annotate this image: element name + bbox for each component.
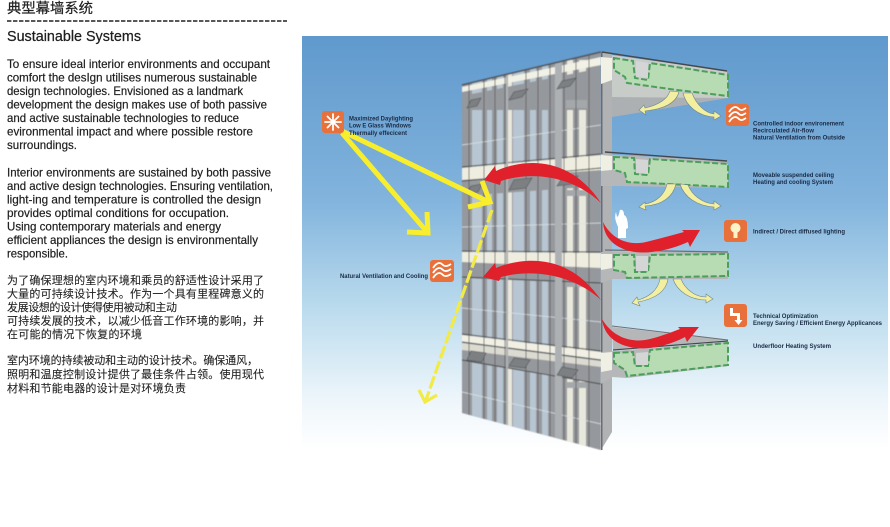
air flow arrows floor 1 [639,91,721,120]
building facade [460,50,605,452]
green ceiling plenum 2 [614,157,728,187]
label: controlled indoor environment: Recirculated Air-flow [753,129,814,135]
text block: chinese paragraph 2: 照明和温度控制设计提供了最佳条件占领。使用现代 [7,367,264,381]
text block: english paragraph 2: Interior environments are sustained by both passive [7,166,271,180]
label: daylighting [349,116,413,137]
text block: chinese paragraph 1: 发展设想的设计使得使用被动和主动 [7,300,177,314]
text block: english paragraph 2: provides optimal conditions for occupation. [7,206,229,220]
green floor plenum 4 [614,343,728,376]
text block: chinese paragraph 1: 大量的可持续设计技术。作为一个具有里程碑意义的 [7,286,264,300]
english heading: Sustainable Systems [7,28,141,45]
text block: english paragraph 1: To ensure ideal interior environments and occupant [7,57,271,71]
icon: light bulb [724,220,747,242]
label: controlled indoor environment: Natural Ventilation from Outside [753,136,846,142]
dashed yellow transmitted light arrow [419,210,492,402]
label: suspended ceiling [753,173,834,186]
text block: english paragraph 1: surroundings. [7,138,77,152]
text block: english paragraph 1: evironmental impact and where possible restore [7,124,253,138]
icon: side ventilation [430,260,454,282]
column and slab edge [601,52,728,450]
text block: english paragraph 2: light-ing and temperature is controlled the design [7,193,261,207]
text block: chinese paragraph 1: 可持续发展的技术，以减少低音工作环境的影响，并 [7,314,264,328]
red arrow upper left [484,163,601,203]
text block: english paragraph 2: Using contemporary materials and energy [7,220,221,234]
text block: english paragraph 2: responsible. [7,246,68,260]
text block: english paragraph 1: comfort the desIgn utilises numerous sustainable [7,70,257,84]
label: suspended ceiling: Heating and cooling System [753,180,833,186]
label: underfloor heating: Underfloor Heating System [753,344,831,350]
text block: chinese paragraph 1: 在可能的情况下恢复的环境 [7,327,142,341]
yellow arrow to facade [342,131,490,207]
red arrow upper right [603,222,700,253]
air flow arrows floor 3 [632,279,713,306]
label: diffused lighting: Indirect / Direct diffused lighting [753,230,845,236]
floor band windows [462,57,601,92]
text block: english paragraph 1: and active sustainable technologies to reduce [7,111,239,125]
text block: english paragraph 1: development the design makes use of both passive [7,97,267,111]
text block: english paragraph 2: and active design technologies. Ensuring ventilation, [7,179,273,193]
text block: chinese paragraph 2: 材料和节能电器的设计是对环境负责 [7,381,186,395]
green ceiling plenum 3 [614,254,728,278]
text block: chinese paragraph 1: 为了确保理想的室内环境和乘员的舒适性设计采用了 [7,273,264,287]
sun shades [467,78,578,378]
icon: indoor ventilation [726,104,749,126]
label: suspended ceiling: Moveable suspended ceiling [753,173,834,179]
label: controlled indoor environment [753,122,846,142]
label: daylighting: Thermally effecicent [349,131,407,137]
label: technical optimization: Energy Saving / Efficient Energy Applicances [753,321,883,327]
label: controlled indoor environment: Controlled indoor environement [753,122,844,128]
person silhouette [615,210,628,238]
icon: daylight sun [322,111,344,133]
label: technical optimization: Technical Optimization [753,314,818,320]
text block: english paragraph 1 [7,57,271,152]
label: natural ventilation and cooling: Natural Ventilation and Cooling [340,274,428,280]
label: daylighting: Low E Glass Windows [349,124,412,130]
text block: english paragraph 2: efficient appliances the design is environmentally [7,233,258,247]
text block: chinese paragraph 2: 室内环境的持续被动和主动的设计技术。确保通风， [7,353,258,367]
chinese title: 典型幕墙系统 [7,0,93,16]
red arrow lower left [483,261,601,300]
label: daylighting: Maximized Daylighting [349,116,413,122]
air flow arrows floor 2 [639,184,721,210]
text block: english paragraph 2 [7,166,273,260]
red arrow lower right [602,319,699,348]
green ceiling plenum 1 [614,58,728,96]
icon: technical optimization [724,304,747,327]
label: technical optimization [753,314,883,327]
text block: chinese paragraph 2 [7,353,264,395]
panel: sky background [302,36,888,450]
text block: chinese paragraph 1 [7,273,264,341]
yellow arrow to ground [342,133,428,233]
text block: english paragraph 1: design technologies. Envisioned as a landmark [7,84,244,98]
